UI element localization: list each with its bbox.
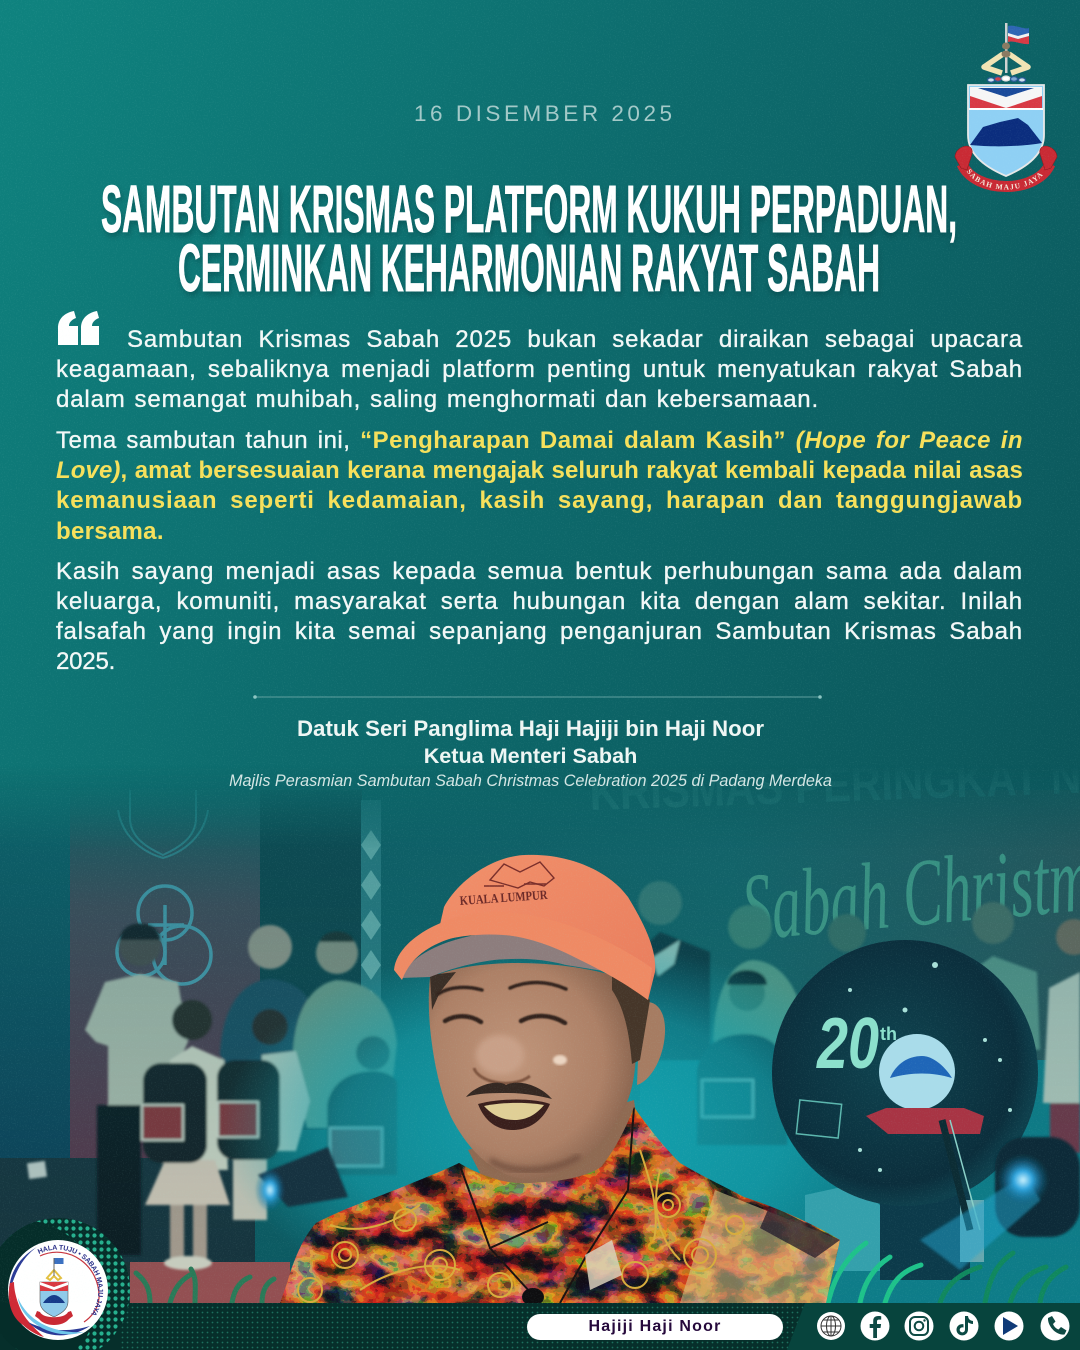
date: 16 DISEMBER 2025: [414, 101, 672, 126]
anniversary balloon: [772, 940, 1038, 1230]
badge halo with halftone: [0, 1215, 135, 1350]
shield band: [970, 87, 1042, 108]
small stage box: [27, 1161, 47, 1179]
stage spotlight right: [920, 1137, 1080, 1270]
icon: quotation mark: [58, 311, 99, 345]
paragraph three: keluarga, komuniti, masyarakat serta hubungan kita dengan alam sekitar. Inilah: [56, 588, 1023, 615]
badge swoosh: [9, 1247, 37, 1296]
badge arc line: [40, 1252, 99, 1322]
speaker role: Ketua Menteri Sabah: [424, 743, 637, 768]
paragraph three: Kasih sayang menjadi asas kepada semua bentuk perhubungan sama ada dalam: [56, 558, 1023, 585]
chief minister portrait: [280, 855, 840, 1306]
arms gripping the pole: [984, 54, 1028, 73]
footer dot texture: [120, 1303, 805, 1350]
balloon number: 20: [815, 1004, 879, 1084]
flag: [1008, 26, 1029, 44]
teal centre glow: [232, 958, 837, 1238]
paragraph two highlighted theme: Love), amat bersesuaian kerana mengajak seluruh rakyat kembali kepada nilai asas: [56, 457, 1023, 484]
teal wash over crowd: [0, 790, 1080, 1303]
hands: [1002, 42, 1010, 58]
Kinabalu mountain: [970, 118, 1042, 146]
balloon ordinal: th: [880, 1024, 897, 1044]
Sabah coat of arms: [954, 23, 1058, 192]
man in white shirt: [85, 924, 188, 1255]
teeth: [484, 1103, 544, 1120]
man in batik shirt: [220, 925, 312, 1071]
footer bar: [0, 1303, 1080, 1350]
backdrop crest outline: [118, 790, 208, 858]
icon: tiktok: [950, 1312, 978, 1340]
balloon stars: [848, 962, 1012, 1172]
eyes and brows: [438, 982, 566, 1023]
girl with backpack: [142, 1000, 230, 1270]
title shadow: [103, 176, 957, 310]
third child with backpack: [327, 1036, 397, 1175]
backdrop diamond strip: [361, 800, 381, 1000]
event note: Majlis Perasmian Sambutan Sabah Christmas Celebration 2025 di Padang Merdeka: [229, 772, 832, 790]
badge crest: [35, 1258, 73, 1325]
cap underside: [401, 932, 622, 978]
temple hair: [430, 972, 456, 1010]
right man with dark jacket: [638, 881, 710, 1060]
boy on the right: [972, 902, 1040, 1050]
paragraph three: 2025.: [56, 648, 115, 675]
flag pole: [1005, 23, 1008, 73]
nose highlight: [476, 1035, 524, 1075]
icon: phone: [1040, 1312, 1070, 1340]
collar shadow: [459, 1107, 634, 1303]
stage plants: [136, 1243, 1066, 1303]
crest beads: [988, 76, 1026, 82]
face: [429, 963, 636, 1180]
boy with songkok and backpack: [697, 970, 787, 1145]
icon: globe: [817, 1312, 845, 1340]
paragraph one: [56, 326, 1023, 413]
name pill: [527, 1314, 783, 1340]
boxes under balloon: [805, 1183, 984, 1280]
man in green batik: [713, 905, 807, 1046]
main title: [101, 172, 957, 310]
chin shadow: [490, 1156, 580, 1170]
motto ribbon: [955, 146, 1057, 186]
name pill: Hajiji Haji Noor: [588, 1318, 722, 1335]
motto text: SABAH MAJU JAYA: [966, 169, 1043, 190]
cheek highlight: [553, 1055, 567, 1065]
nose shading: [474, 1068, 530, 1083]
backdrop circle logo: [117, 886, 211, 984]
ear: [637, 1002, 665, 1085]
second child with backpack: [217, 1009, 310, 1220]
light shirt panel: [680, 1190, 840, 1303]
icon: facebook: [860, 1312, 890, 1340]
photo backdrop panels: [0, 765, 1080, 1303]
cap embroidered text: KUALA LUMPUR: [459, 887, 548, 908]
batik shirt: [280, 1107, 840, 1303]
badge text: HALA TUJU • SABAH MAJU JAYA: [38, 1244, 104, 1316]
cap bill: [394, 912, 652, 1000]
rightmost man: [1043, 919, 1080, 1153]
man in green shirt: [293, 932, 397, 1128]
smile: [478, 1100, 550, 1130]
paragraph two highlighted theme: bersama.: [56, 518, 164, 545]
paragraph three: [56, 558, 1023, 675]
paragraph two highlighted theme: [56, 427, 1023, 545]
Hala Tuju badge: [8, 1240, 108, 1340]
paragraph three: falsafah yang ingin kita semai sepanjang penganjuran Sambutan Krismas Sabah: [56, 618, 1023, 645]
icon: play: [994, 1312, 1024, 1340]
side hair: [612, 968, 650, 1064]
man behind balloon: [828, 914, 866, 952]
background event photo: [0, 747, 1080, 1320]
paragraph two highlighted theme: Tema sambutan tahun ini, “Pengharapan Damai dalam Kasih” (Hope for Peace in: [56, 427, 1023, 454]
microphone: [522, 1288, 544, 1306]
balloon logo: [879, 1034, 955, 1110]
stage spotlight left: [255, 1147, 348, 1212]
paragraph one: dalam semangat muhibah, saling menghormati dan kebersamaan.: [56, 386, 819, 413]
shirt details: [298, 1107, 840, 1303]
shield: [968, 85, 1044, 176]
divider: [253, 695, 822, 699]
paragraph one: Sambutan Krismas Sabah 2025 bukan sekadar diraikan sebagai upacara: [127, 326, 1023, 353]
paragraph one: keagamaan, sebaliknya menjadi platform penting untuk menyatukan rakyat Sabah: [56, 356, 1023, 383]
moustache: [466, 1083, 552, 1099]
cap crown: [436, 855, 655, 1000]
stage crowd: [27, 881, 1080, 1270]
cap embroidery logo: [484, 862, 554, 888]
gold swirls: [298, 1150, 744, 1302]
undershirt: [585, 1240, 622, 1290]
dark shoulder band: [760, 1205, 840, 1258]
attribution: [229, 716, 832, 790]
speaker name: Datuk Seri Panglima Haji Hajiji bin Haji Noor: [297, 716, 764, 741]
paragraph two highlighted theme: kemanusiaan seperti kedamaian, kasih sayang, harapan dan tanggungjawab: [56, 487, 1023, 514]
icon: instagram: [904, 1312, 934, 1340]
social icons: [817, 1312, 1070, 1340]
neck: [468, 1100, 648, 1230]
